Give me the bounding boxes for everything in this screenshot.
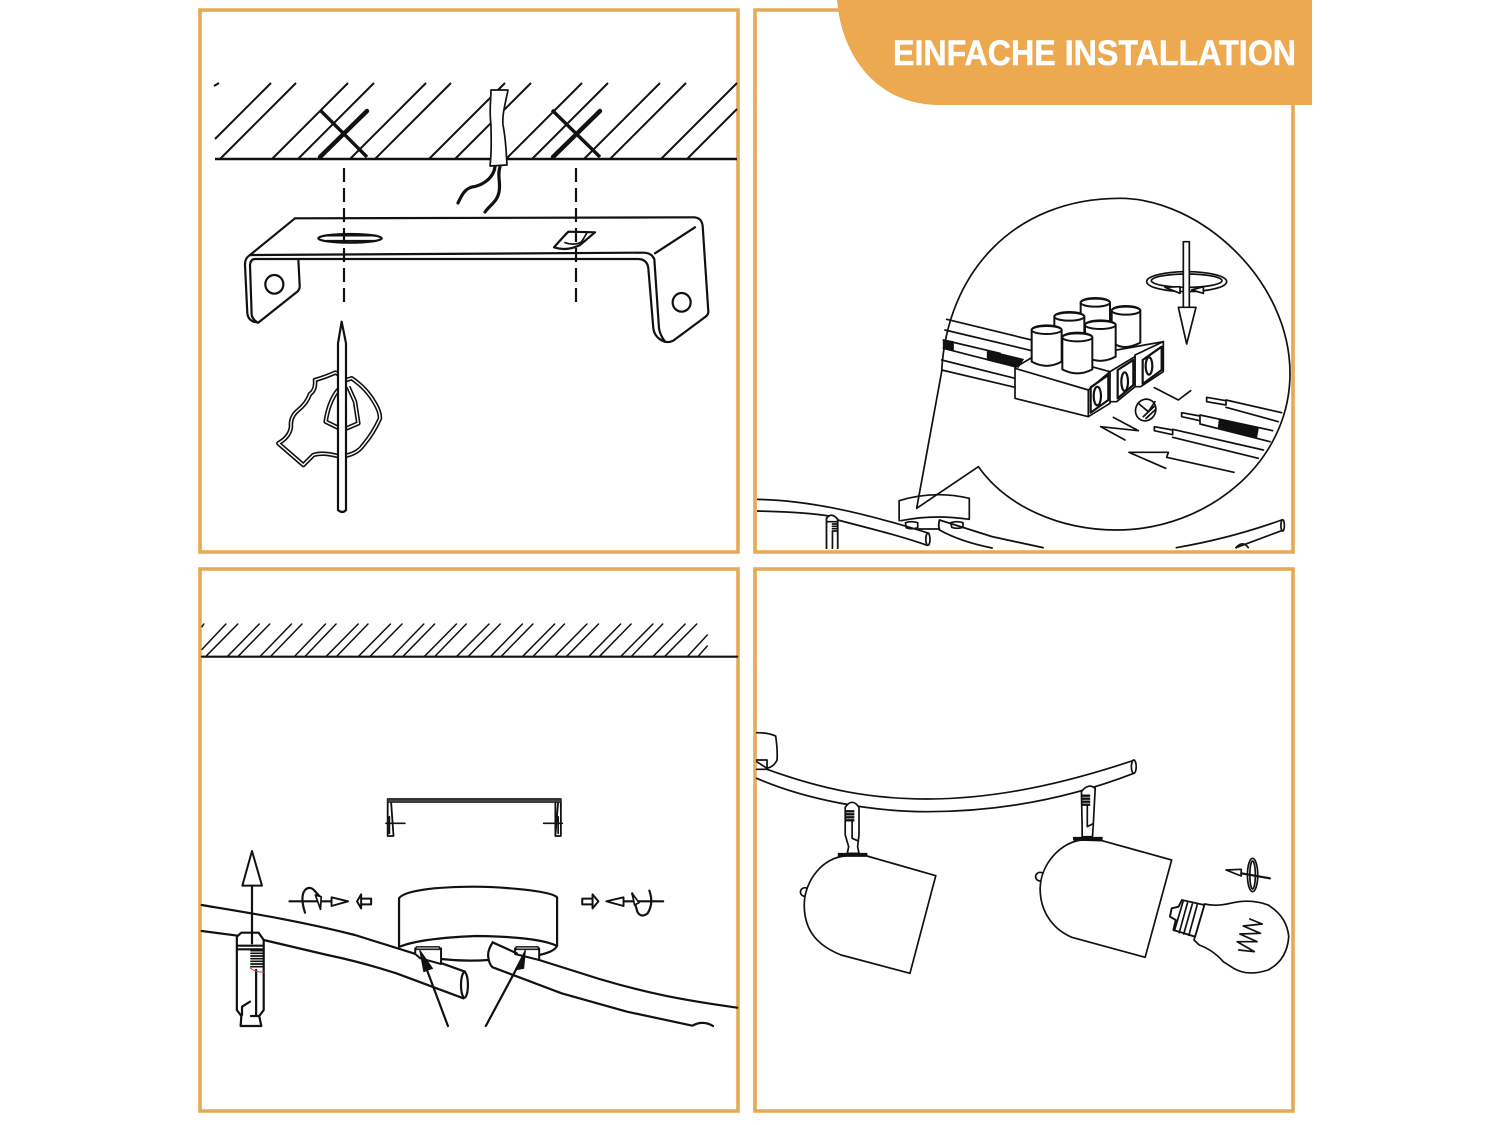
right rotate arrow [582,891,663,915]
ceiling cable with two wires [458,90,508,212]
hand holding drill bit [278,322,380,512]
ceiling hatching [214,83,737,159]
panel: mark and drill ceiling [200,10,738,552]
drawing group in panel 4 [757,733,1289,973]
right tube [488,942,737,1026]
bulb rotate arrow [1226,858,1270,892]
hand outline [278,373,380,465]
mounting bracket [245,217,708,342]
drill bit [338,322,346,512]
drawing group in panel 3 [202,799,737,1026]
ceiling hatching [202,624,737,657]
left tube [202,905,468,998]
panel frame bottom left [200,569,738,1111]
left rotate arrow [290,888,371,913]
right wires [1154,397,1282,458]
panel: fix bar to canopy [200,569,738,1111]
zoom bubble detail [917,198,1290,530]
magnifier outline [917,198,1290,530]
right spotlight [1036,786,1172,957]
panel frame top left [200,10,738,552]
dashed guide lines [344,168,576,304]
canopy [399,887,557,961]
loose screw [1132,388,1191,424]
cover bracket [386,799,562,836]
panel: wire connection [755,10,1293,552]
panel frame top right [755,10,1293,552]
insertion arrows [1101,417,1234,472]
terminal screws [1032,298,1140,373]
canopy and curved tube [757,733,1136,812]
banner: easy installation [837,0,1312,105]
panel frame bottom right [755,569,1293,1111]
light bulb [1170,900,1289,973]
arrows pointing to screws [420,950,525,1026]
rotate and press arrow [1147,242,1227,344]
left spotlight [800,802,936,973]
cross marks [320,110,600,157]
banner shape [837,0,1312,105]
canopy mounting tabs [415,947,539,964]
banner title: EINFACHE INSTALLATION [893,34,1296,73]
lamp tubes and canopy at panel bottom [756,495,1284,548]
lamp stem with up arrow [237,851,264,1026]
left wires [942,319,1032,387]
terminal block [1015,342,1163,417]
panel: fit light bulbs [755,569,1293,1111]
